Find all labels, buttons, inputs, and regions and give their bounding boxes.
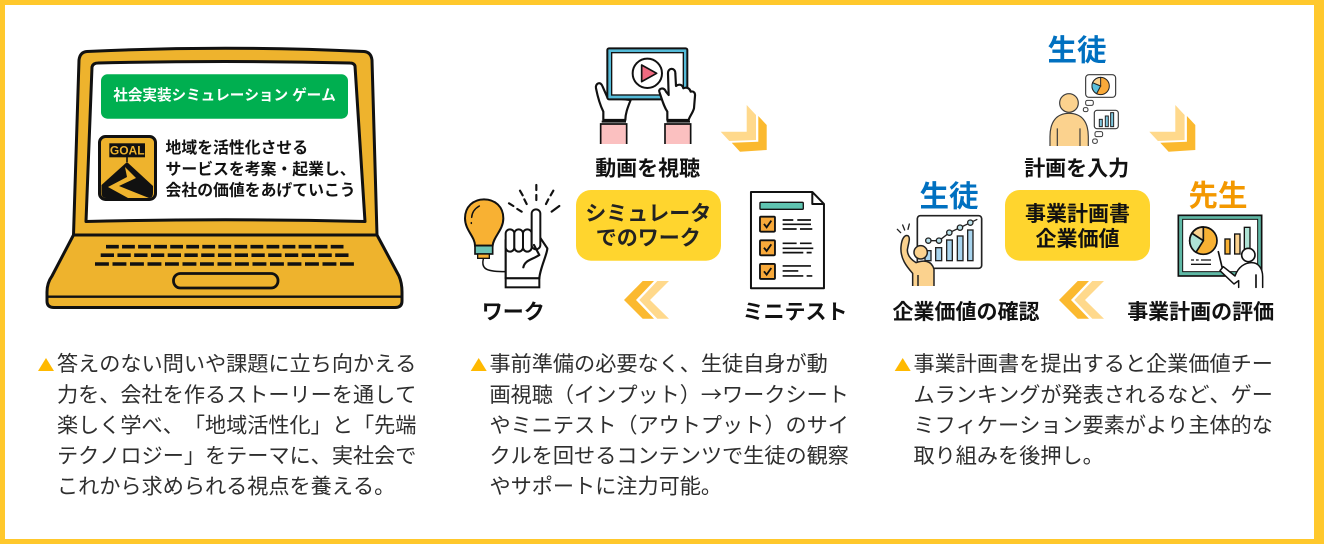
trackpad <box>174 274 278 288</box>
heading: 先生: 先生 <box>1188 180 1248 213</box>
icon: light bulb and pointing hand <box>465 185 559 287</box>
right hand <box>659 69 695 120</box>
center box: business plan and company value: 事業計画書 <box>1025 202 1130 226</box>
heading: 生徒 left: 生徒 <box>919 180 979 214</box>
icon: goal road sign <box>100 136 156 200</box>
tablet <box>607 48 687 99</box>
thought bubble: pie chart <box>1083 75 1116 112</box>
label: 企業価値の確認: 企業価値の確認 <box>892 301 1040 324</box>
paragraph <box>57 352 416 498</box>
laptop base <box>47 235 402 308</box>
icon: hands on video tablet <box>596 48 695 144</box>
laptop lid <box>74 48 377 235</box>
arrow: bottom chevron, cycle 2 <box>1059 281 1104 319</box>
icon: thinking student <box>1050 75 1118 146</box>
keyboard <box>95 247 357 264</box>
center box: business plan and company value: 企業価値 <box>1036 228 1120 251</box>
document sheet <box>751 192 824 288</box>
board text lines <box>1191 260 1211 264</box>
paragraph: ミフィケーション要素がより主体的な <box>914 414 1273 438</box>
center box: simulator work: シミュレータ <box>585 202 711 226</box>
trend line <box>926 219 977 243</box>
paragraph: テクノロジー」をテーマに、実社会で <box>57 444 416 468</box>
thought bubble: bar chart <box>1093 110 1118 143</box>
label: 計画を入力: 計画を入力 <box>1024 158 1129 180</box>
screen message text: サービスを考案・起業し、 <box>166 160 356 178</box>
screen message text: 地域を活性化させる <box>166 138 308 157</box>
bar chart <box>1225 227 1250 254</box>
checklist lines <box>783 220 813 276</box>
bulb highlight <box>471 206 479 223</box>
heading: 生徒 top: 生徒 <box>1047 34 1107 68</box>
spark rays <box>509 185 559 212</box>
screen message text <box>166 138 356 200</box>
icon: goal road sign: GOAL <box>110 144 145 158</box>
board frame <box>1178 215 1262 276</box>
chart board <box>917 216 982 268</box>
screen message text: 会社の価値をあげていこう <box>166 180 356 200</box>
bullet triangle <box>471 358 487 371</box>
bulb <box>465 199 503 246</box>
icon: checklist document <box>751 192 824 288</box>
label: ミニテスト: ミニテスト <box>742 301 848 324</box>
arrow: bottom chevron, cycle 1 <box>624 281 669 319</box>
paragraph: 画視聴（インプット）→ワークシート <box>490 378 849 409</box>
screen title banner <box>101 74 348 119</box>
bullet triangle <box>38 358 54 371</box>
paragraph: 答えのない問いや課題に立ち向かえる <box>57 352 416 376</box>
paragraph <box>490 352 849 498</box>
paragraph: 楽しく学べ、「地域活性化」と「先端 <box>57 414 416 438</box>
tablet screen <box>612 53 683 95</box>
teacher figure <box>1218 248 1263 287</box>
paragraph: 事業計画書を提出すると企業価値チー <box>914 352 1273 376</box>
pie chart <box>1190 227 1217 254</box>
bulb base <box>475 246 506 272</box>
icon: teacher at presentation board <box>1178 215 1263 287</box>
label: ワーク: ワーク <box>482 301 545 324</box>
document title bar <box>760 202 803 209</box>
person <box>1050 94 1088 146</box>
bullet triangle <box>895 358 911 371</box>
paragraph: 事前準備の必要なく、生徒自身が動 <box>490 352 828 376</box>
icon: student checking rising chart <box>897 216 982 286</box>
paragraph: 力を、会社を作るストーリーを通して <box>57 383 416 407</box>
center box: business plan and company value <box>1005 190 1150 261</box>
paragraph: 取り組みを後押し。 <box>914 444 1104 468</box>
text block: column 3 <box>895 352 1273 468</box>
sleeves <box>601 122 691 144</box>
hand <box>506 209 547 287</box>
arrow: top right chevron, cycle 1 <box>721 105 767 152</box>
arrow: top right chevron, cycle 2 <box>1149 105 1195 152</box>
paragraph: クルを回せるコンテンツで生徒の観察 <box>490 444 849 468</box>
check boxes <box>760 217 775 279</box>
label: 事業計画の評価: 事業計画の評価 <box>1127 300 1274 324</box>
person with raised arm <box>901 236 934 286</box>
board surface <box>1183 219 1258 272</box>
text block: column 1 <box>38 352 416 498</box>
label: 動画を視聴: 動画を視聴 <box>595 158 700 180</box>
bars <box>925 230 973 261</box>
base edge line <box>47 296 402 298</box>
paragraph: ムランキングが発表されるなど、ゲー <box>914 383 1273 407</box>
excitement marks <box>897 224 909 233</box>
left hand <box>596 83 631 120</box>
paragraph <box>914 352 1273 468</box>
center box: simulator work: でのワーク <box>596 227 701 250</box>
center box: simulator work <box>576 190 721 261</box>
text block: column 2 <box>471 352 849 498</box>
paragraph: やミニテスト（アウトプット）のサイ <box>490 414 849 438</box>
play button <box>633 59 662 88</box>
illustration: laptop <box>47 48 402 308</box>
paragraph: これから求められる視点を養える。 <box>57 474 395 498</box>
laptop screen <box>86 62 365 222</box>
paragraph: やサポートに注力可能。 <box>490 474 722 498</box>
screen title banner: 社会実装シミュレーション ゲーム <box>113 86 336 104</box>
